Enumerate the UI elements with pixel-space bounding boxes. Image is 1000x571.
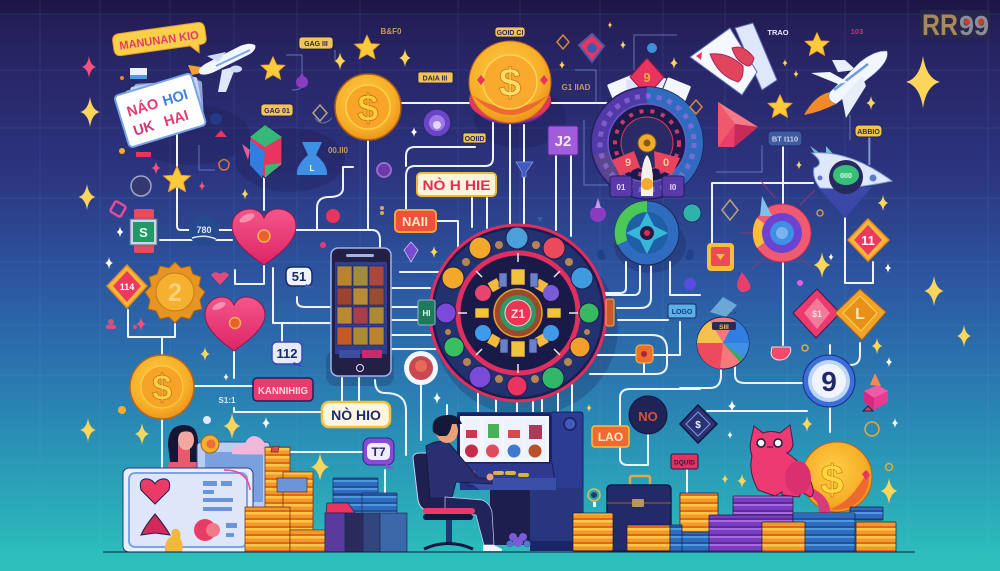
tag: NAI (395, 210, 436, 232)
tag: KANNIHIIG (253, 378, 313, 401)
gear coin: 2 (145, 262, 205, 323)
roulette wheel: top right: 9 (625, 157, 631, 169)
eye badge: 0II0 (840, 173, 852, 180)
target ring (740, 180, 815, 268)
speech bubble: 112: 112 (277, 346, 297, 361)
gold labels: top row (261, 27, 863, 155)
pie chart: SIII (719, 324, 729, 331)
pill label: BT I110: BT I110 (772, 134, 798, 144)
tag: J2: J2 (555, 133, 571, 150)
tag: J2 (548, 126, 578, 155)
side tabs on main wheel (418, 299, 614, 326)
tag: pink small (671, 454, 698, 469)
coin stacks: left (245, 446, 325, 552)
gold labels: top row: TRAO (767, 28, 789, 37)
back card and objects (197, 435, 270, 510)
eye badge (810, 146, 892, 218)
roulette wheel: top right (591, 87, 703, 199)
gold labels: top row: B&F0 (381, 27, 402, 36)
logo: RR99: RR (922, 9, 958, 42)
logo: RR99 (920, 9, 990, 42)
speech bubble: T7: T7 (371, 445, 386, 459)
gold labels: top row: G1 IIAD (562, 83, 591, 92)
gold labels: top row: 00.II0 (328, 146, 349, 155)
heart: lower (205, 297, 265, 351)
red square tag (707, 243, 734, 271)
tag: NO H HIE (417, 173, 496, 196)
circle badge: 780 (189, 216, 219, 246)
gold octagon badge: L (855, 306, 865, 323)
pink diamond: $1 (812, 309, 822, 319)
coin: top left dollar: $ (357, 88, 379, 130)
playing cards: top right (690, 23, 777, 95)
tag: NO H HIE: NÒ H HIE (422, 176, 490, 193)
dark diamond badge (680, 405, 717, 443)
connector lines (128, 103, 873, 495)
blue badge: 9 (803, 355, 855, 407)
logo: RR99: 99 (959, 10, 989, 41)
yellow label: ABBIO: ABBIO (857, 129, 880, 136)
speech bubble: T7 (363, 438, 395, 469)
ruby gem (718, 102, 758, 147)
tag: orange small (636, 345, 653, 363)
sparkles (79, 22, 971, 504)
speech bubble: 51: 51 (292, 269, 306, 284)
speech bubble: MANUNAN KIO (112, 22, 208, 64)
coin stacks: right (573, 493, 793, 552)
tag: KANNIHIIG: KANNIHIIG (258, 386, 308, 397)
card: NAO HOI UK HAI (112, 65, 215, 149)
briefcase (607, 476, 671, 551)
tag: LOGO: LOGO (672, 309, 693, 316)
roulette wheel: top right: 01 (617, 183, 626, 192)
pill label: BT I110 (768, 131, 802, 146)
tag: LAO (592, 426, 629, 447)
pink cube icon (863, 373, 888, 411)
side tabs on main wheel: HI (422, 309, 430, 318)
card: NAO HOI UK HAI: HOI (161, 87, 190, 110)
cards fan above roulette: 9 (643, 70, 651, 85)
coin: top left dollar (335, 74, 401, 140)
small token: top centre (423, 34, 657, 137)
roulette wheel: top right: 0 (663, 157, 669, 169)
pink pill (771, 347, 791, 360)
heart: upper (232, 209, 296, 265)
dark diamond badge: $ (695, 420, 701, 431)
gear coin: 2: 2 (168, 279, 182, 307)
small decorative icons: left (106, 68, 418, 424)
diamond badge: 11: 11 (861, 233, 875, 248)
coin: cat dollar (802, 442, 872, 512)
gold labels: top row: GOID CI (497, 30, 523, 37)
tag: LAO: LAO (598, 430, 623, 444)
gold octagon badge (835, 289, 886, 340)
gold labels: top row: OOIID (465, 136, 484, 143)
tag: pink small: DQUID (674, 460, 695, 466)
coin: left dollar (130, 355, 194, 419)
yellow label: ABBIO (855, 125, 882, 165)
hourglass icon (516, 162, 533, 177)
stars (163, 32, 829, 192)
gold labels: top row: 103 (851, 27, 863, 36)
coin stacks: far right (762, 507, 896, 552)
coin: left dollar: $ (152, 367, 172, 408)
small coin pin (588, 489, 600, 507)
roulette wheel: top right: I0 (670, 183, 677, 192)
round red badge (404, 351, 438, 385)
diamond badge: 114 (107, 265, 147, 308)
gem: multicolor (242, 125, 282, 178)
dollar tag: green (130, 209, 157, 253)
speech bubble: MANUNAN KIO: MANUNAN KIO (119, 30, 200, 53)
ground line (103, 551, 915, 553)
pie chart (697, 297, 749, 369)
small rings right (802, 345, 892, 470)
card: NAO HOI UK HAI: NÁO (125, 95, 161, 121)
money bag: L (310, 164, 315, 173)
card: NAO HOI UK HAI: HAI (162, 108, 191, 130)
green wheel (614, 200, 680, 266)
diamond badge: 11 (848, 219, 889, 261)
pink cat (750, 425, 830, 515)
speech bubble: 112 (272, 342, 304, 367)
small label: S1:1: S1:1 (219, 396, 236, 405)
blue badge: 9: 9 (821, 366, 837, 397)
dark shadow blobs (130, 88, 686, 416)
person at slot machine (413, 415, 502, 551)
diamond badge: 114: 114 (120, 282, 134, 292)
card: NAO HOI UK HAI: UK (132, 118, 157, 140)
coin: cat dollar: $ (820, 456, 844, 503)
cards fan above roulette (606, 58, 692, 120)
pink diamond (793, 289, 840, 338)
plane: top left (188, 44, 255, 92)
tag: NAI: NAII (402, 214, 428, 229)
woman at desk (168, 425, 200, 468)
smartphone (331, 248, 391, 376)
main roulette wheel: Z1 (511, 307, 525, 321)
tag: LOGO (668, 304, 696, 318)
speech bubble: 51 (286, 267, 316, 289)
blue stacks and blocks (325, 478, 407, 552)
tag: NO HIO (322, 402, 390, 427)
coin: top centre dollar (469, 41, 551, 124)
tag: NO HIO: NÒ HIO (331, 406, 381, 423)
gold labels: top row: DAIA III (423, 76, 447, 82)
button: NO: NO (638, 409, 658, 424)
small droplets and pins (537, 100, 823, 292)
dollar tag: green: S (139, 225, 148, 240)
gold labels: top row: GAG 01 (264, 108, 290, 115)
money bag (297, 142, 327, 175)
gold labels: top row: GAG III (304, 41, 328, 48)
ID card panel (123, 468, 253, 552)
main roulette wheel (430, 225, 606, 401)
purple flower (506, 533, 530, 548)
slot machine (457, 412, 583, 551)
coin: top centre dollar: $ (499, 61, 521, 105)
plane: top right (804, 51, 887, 118)
circle badge: 780: 780 (196, 225, 212, 235)
button: NO (629, 396, 667, 434)
